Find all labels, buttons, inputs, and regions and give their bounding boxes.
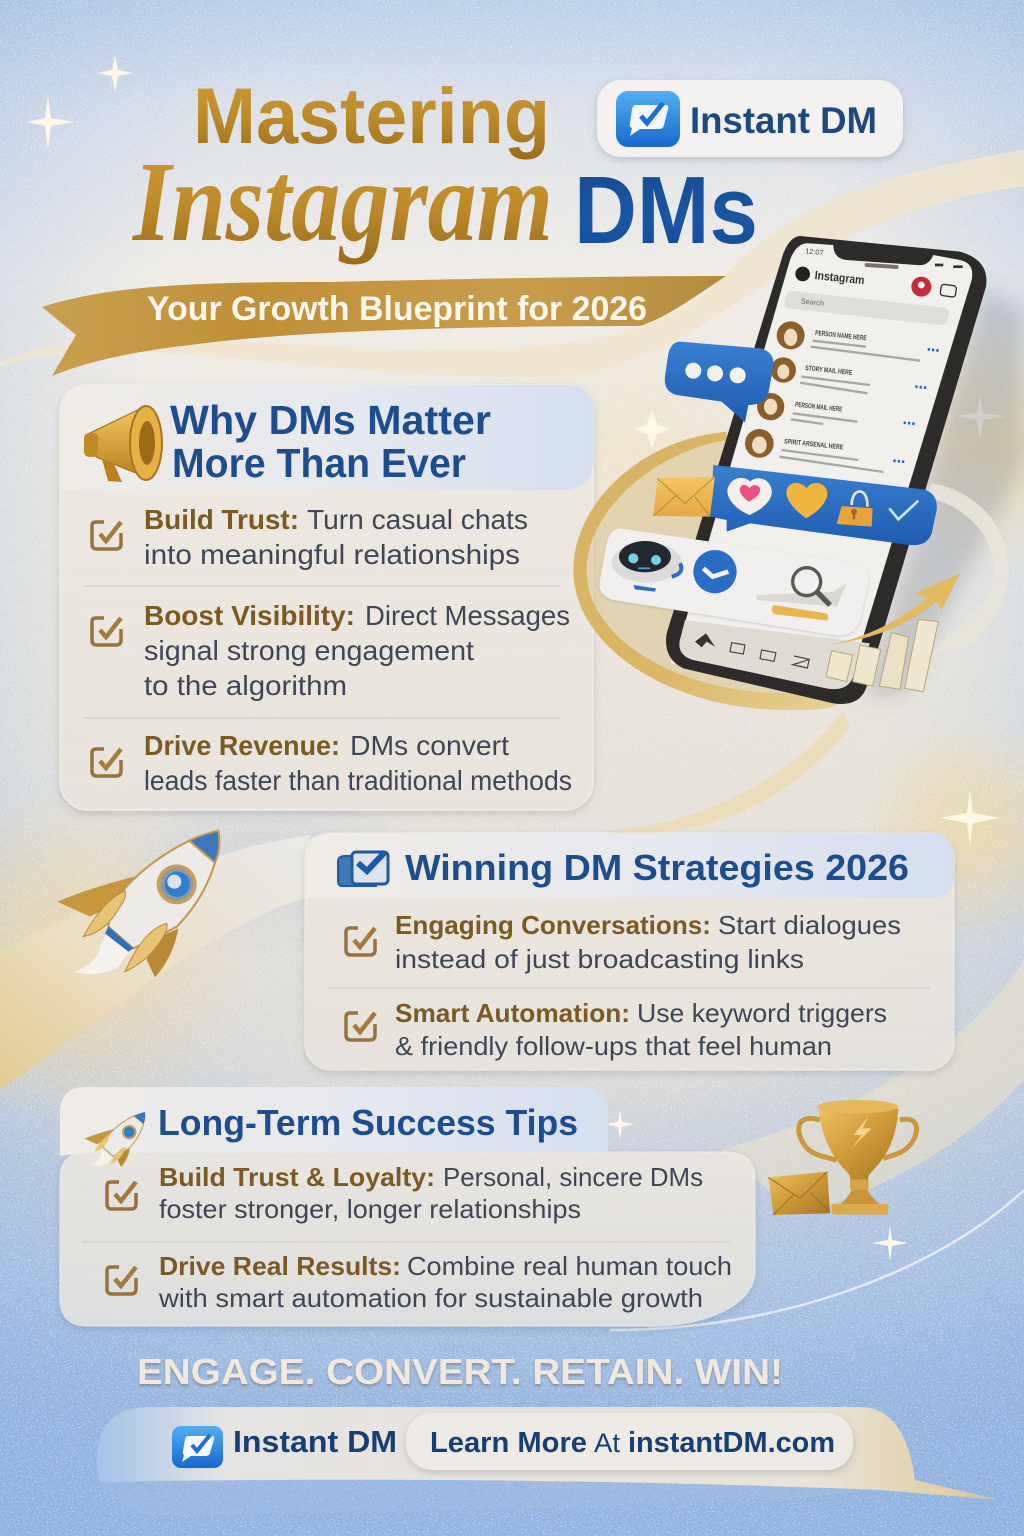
heading: Winning DM Strategies 2026 [405, 847, 909, 888]
item: engaging conversations: Start dialogues [718, 910, 901, 940]
ribbon banner: Your Growth Blueprint for 2026 [147, 290, 647, 328]
gold ring [573, 432, 837, 710]
chat bubble: typing [665, 342, 773, 422]
icon: robot [612, 541, 682, 592]
footer bar [97, 1407, 1000, 1515]
item: engaging conversations: instead of just broadcasting links [395, 944, 804, 974]
phone body [666, 236, 986, 704]
title [131, 71, 758, 265]
item: smart automation: Smart Automation: [395, 998, 630, 1028]
cta pill [406, 1413, 853, 1470]
item: boost visibility: signal strong engagement [144, 635, 474, 666]
icon: instant dm logo [616, 91, 680, 147]
item: smart automation [346, 998, 887, 1061]
item: boost visibility: to the algorithm [144, 670, 347, 701]
icon: instant dm logo [172, 1426, 223, 1468]
nav icons [695, 633, 715, 647]
brand badge [597, 80, 903, 157]
item: boost visibility: Boost Visibility: [144, 600, 355, 631]
phone body: Search [800, 296, 825, 308]
item: drive revenue: Drive Revenue: [144, 730, 340, 761]
cta pill: Learn More [430, 1427, 587, 1459]
heading: Why DMs Matter [170, 397, 491, 443]
item: engaging conversations: Engaging Conversations: [395, 910, 711, 940]
phone body: Instagram [814, 268, 865, 287]
title: DMs [574, 157, 758, 264]
trophy and envelope [768, 1100, 917, 1215]
item: build trust and loyalty [107, 1162, 703, 1224]
panel: long-term success tips [60, 1087, 755, 1326]
brand badge: Instant DM [690, 100, 877, 141]
heading: More Than Ever [172, 440, 466, 486]
item: drive real results [107, 1251, 732, 1313]
item: drive revenue [92, 730, 572, 796]
item: engaging conversations [346, 910, 901, 974]
icon: strategy chat [338, 852, 388, 886]
silver ring [927, 483, 1009, 653]
rocket illustration [57, 831, 219, 977]
icon: small rocket [84, 1112, 145, 1167]
item: build trust [92, 504, 528, 570]
item: build trust and loyalty: Build Trust & Loyalty: [159, 1162, 435, 1192]
item: build trust: Build Trust: [144, 504, 299, 535]
panel: why DMs matter [60, 385, 593, 810]
panel: winning DM strategies [305, 833, 954, 1070]
cta pill: At [594, 1428, 621, 1458]
search bar [785, 291, 949, 325]
icon: megaphone [84, 406, 162, 482]
phone illustration [573, 236, 1024, 710]
ribbon swoosh: bottom curve [610, 1190, 1024, 1330]
sparkle [638, 415, 668, 445]
item: drive real results: Drive Real Results: [159, 1251, 401, 1281]
item: smart automation: Use keyword triggers [637, 998, 887, 1028]
title: Mastering [193, 71, 550, 160]
sparkles [27, 55, 1005, 1262]
ribbon banner [42, 276, 726, 376]
item: drive real results: Combine real human touch [407, 1251, 732, 1281]
message reaction bar [653, 465, 937, 545]
item: build trust: Turn casual chats [307, 504, 528, 535]
glass lens [587, 440, 837, 693]
status and app header: 12:07 [805, 246, 824, 257]
phone body: STORY MAIL HERE [805, 365, 853, 377]
tagline: ENGAGE. CONVERT. RETAIN. WIN! [137, 1351, 783, 1392]
item: build trust and loyalty: Personal, sincere DMs [443, 1162, 703, 1192]
phone body: PERSON MAIL HERE [795, 402, 843, 414]
heading: Long-Term Success Tips [158, 1102, 578, 1143]
item: drive real results: with smart automation for sustainable growth [158, 1283, 703, 1313]
automation card [599, 528, 869, 636]
item: boost visibility: Direct Messages [365, 600, 570, 631]
footer bar: Instant DM [233, 1424, 397, 1459]
chat rows [745, 321, 805, 458]
title: Instagram [131, 138, 553, 265]
item: build trust: into meaningful relationships [144, 539, 520, 570]
item: drive revenue: leads faster than traditional methods [144, 765, 572, 796]
cta pill: instantDM.com [628, 1427, 835, 1459]
item: smart automation: & friendly follow-ups that feel human [395, 1031, 832, 1061]
heading [170, 397, 491, 486]
phone body: SPIRIT ARSENAL HERE [784, 438, 844, 452]
growth arrow and bars [826, 573, 960, 692]
item: boost visibility [92, 600, 570, 701]
ribbon swoosh: middle right [600, 712, 850, 834]
phone shadow [863, 287, 1024, 697]
ribbon swoosh: lower right [720, 960, 1024, 1215]
item: drive revenue: DMs convert [350, 730, 509, 761]
ribbon swoosh: rocket trail [0, 835, 310, 1090]
item: build trust and loyalty: foster stronger, longer relationships [159, 1194, 581, 1224]
phone body: PERSON NAME HERE [815, 330, 867, 342]
ribbon swoosh: top right [0, 150, 1024, 377]
